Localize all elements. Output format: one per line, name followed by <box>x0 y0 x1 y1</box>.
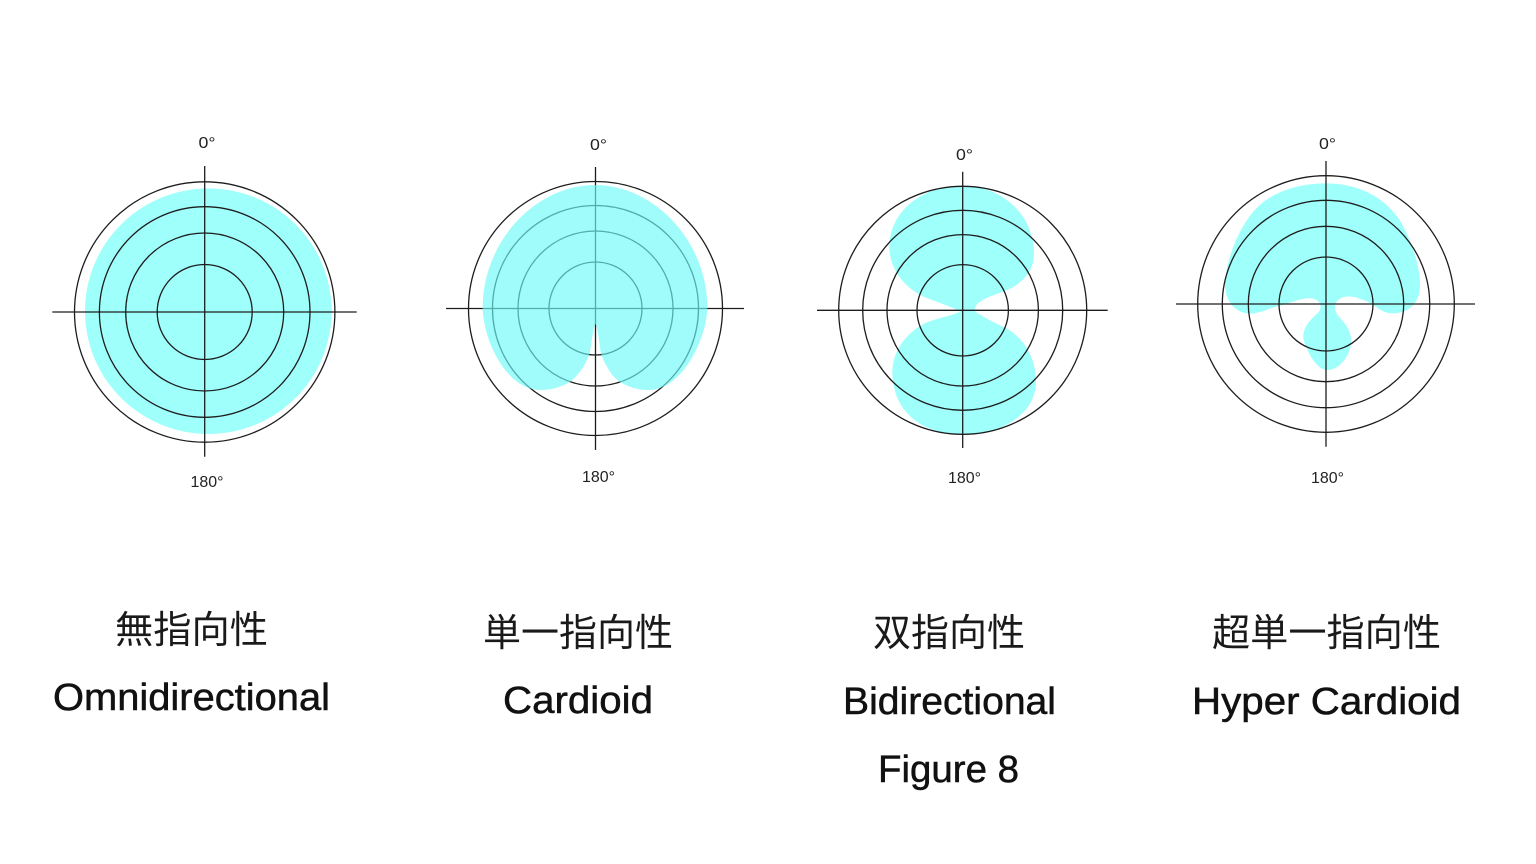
label: 0 degrees: 0° <box>956 147 973 164</box>
label: 180 degrees: 180° <box>582 469 615 486</box>
heading: bidirectional English: Bidirectional <box>843 681 1056 723</box>
heading: cardioid English: Cardioid <box>503 680 653 722</box>
label: 180 degrees: 180° <box>948 470 981 487</box>
heading: bidirectional Japanese: 双指向性 <box>873 613 1025 655</box>
label: 0 degrees: 0° <box>198 135 216 152</box>
heading: hyper cardioid Japanese: 超単一指向性 <box>1212 613 1441 655</box>
polar grid: omnidirectional <box>52 166 357 457</box>
polar pattern fill: bidirectional <box>889 186 1036 434</box>
heading: omnidirectional Japanese: 無指向性 <box>115 610 268 652</box>
panel: bidirectional <box>817 147 1108 791</box>
label: 180 degrees: 180° <box>1311 470 1344 487</box>
heading: figure 8: Figure 8 <box>878 749 1019 791</box>
panel: hyper cardioid <box>1176 136 1475 723</box>
panel: omnidirectional <box>52 135 357 719</box>
heading: omnidirectional English: Omnidirectional <box>53 677 330 719</box>
label: 0 degrees: 0° <box>590 137 607 154</box>
polar pattern fill: omnidirectional <box>85 188 332 434</box>
heading: hyper cardioid English: Hyper Cardioid <box>1192 681 1461 723</box>
label: 0 degrees: 0° <box>1319 136 1336 153</box>
heading: cardioid Japanese: 単一指向性 <box>483 613 673 655</box>
polar pattern fill: hyper cardioid <box>1225 183 1420 370</box>
polar grid: bidirectional <box>817 172 1108 448</box>
panel: cardioid <box>446 137 744 722</box>
polar grid: cardioid <box>446 167 744 450</box>
label: 180 degrees: 180° <box>190 474 224 491</box>
polar grid: hyper cardioid <box>1176 161 1475 447</box>
polar pattern fill: cardioid <box>483 185 707 390</box>
